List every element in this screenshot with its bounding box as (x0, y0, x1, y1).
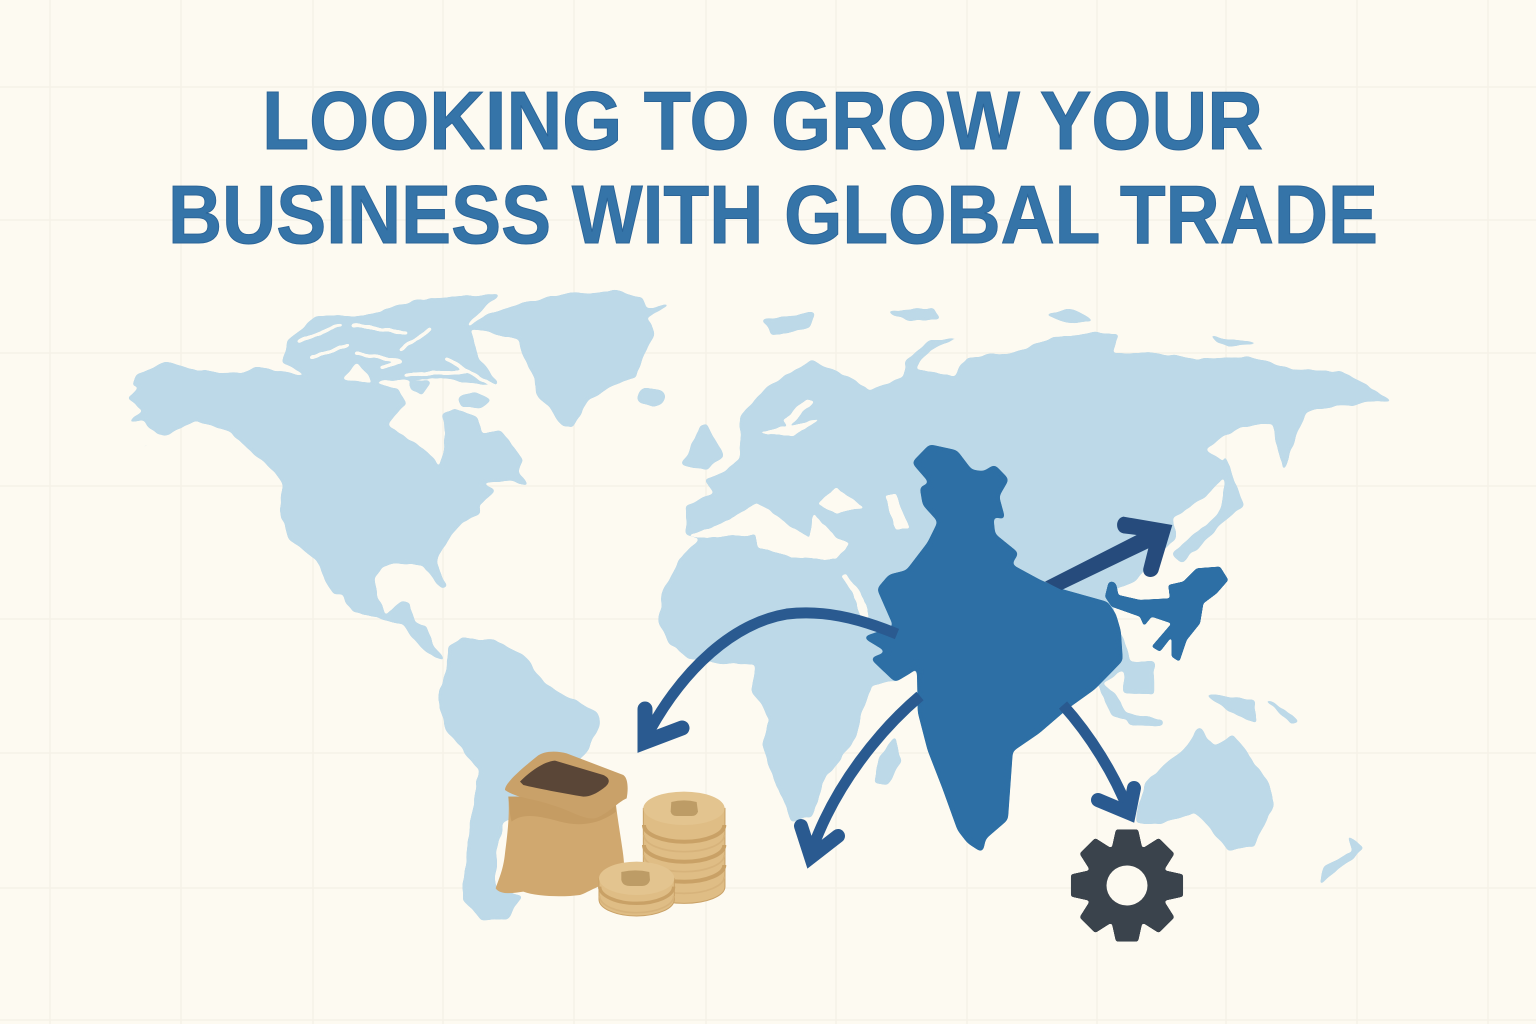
arrows (645, 517, 1172, 857)
icon: coin stack (643, 792, 725, 903)
icon: small coin (599, 862, 674, 916)
icon: sack (496, 752, 628, 896)
arrow: to south america (645, 613, 897, 742)
seas and channels (300, 325, 910, 618)
arrow: to east asia (1045, 517, 1172, 590)
title: BUSINESS WITH GLOBAL TRADE (168, 168, 1378, 261)
icon: sack and coins (496, 752, 725, 916)
arrow: to south (801, 696, 920, 857)
title (168, 74, 1378, 261)
world map (127, 291, 1391, 920)
arrow: to gear (1063, 705, 1134, 813)
americas and greenland (127, 291, 724, 920)
india (863, 445, 1122, 852)
eurasia and africa (640, 309, 1391, 884)
land masses (127, 291, 1391, 920)
title: LOOKING TO GROW YOUR (262, 74, 1263, 167)
icon: gear (1071, 830, 1183, 942)
southeast asia blob (1105, 567, 1228, 662)
